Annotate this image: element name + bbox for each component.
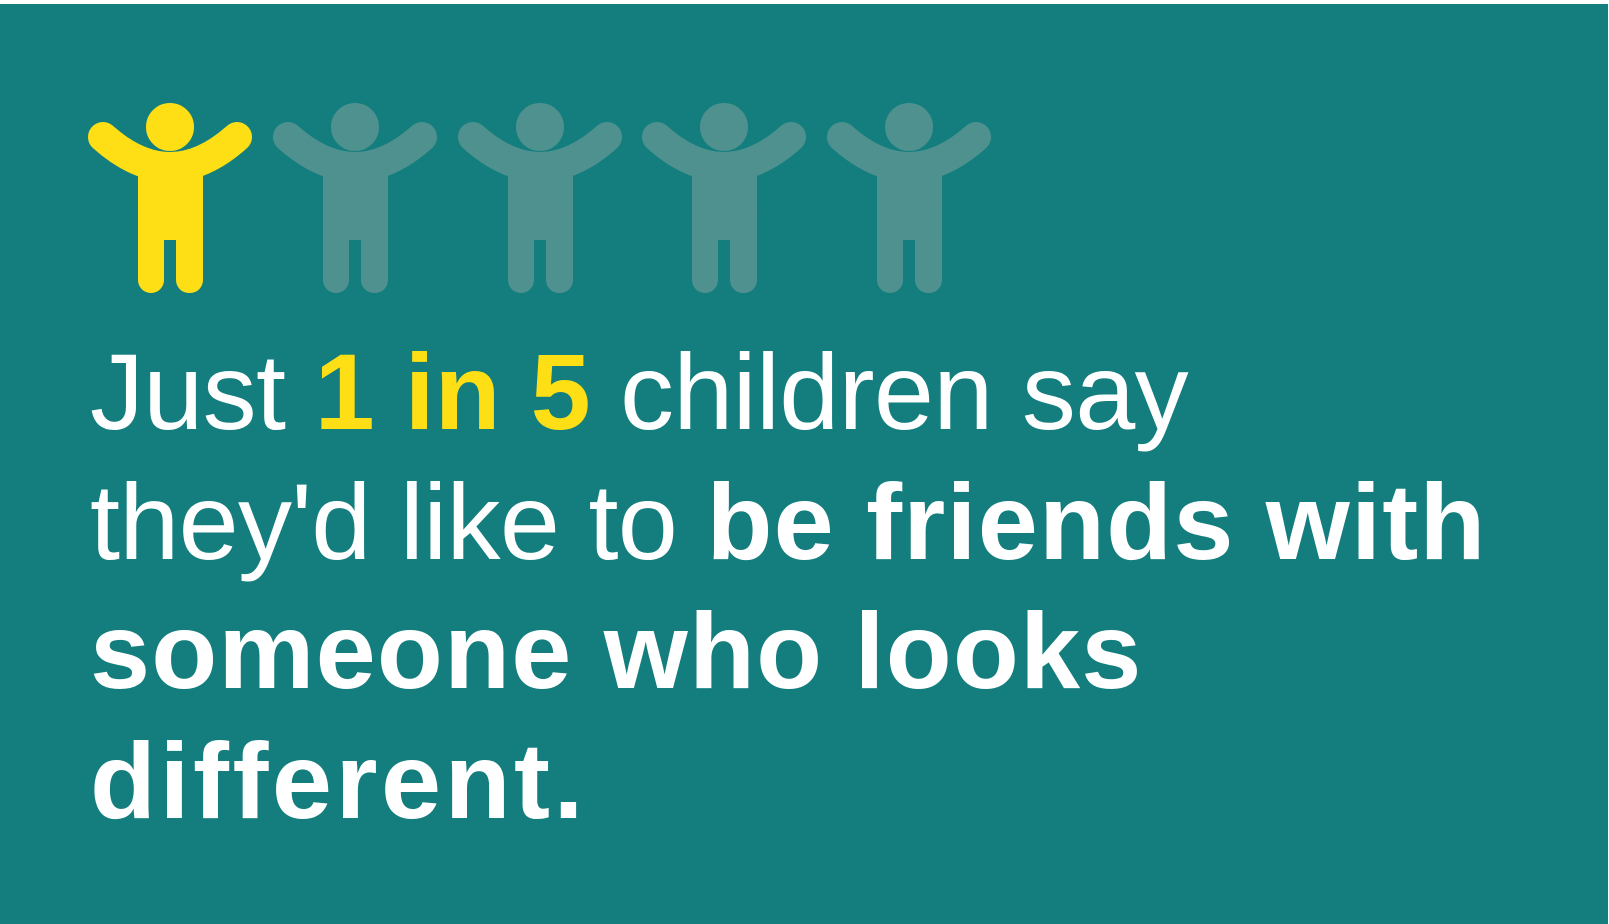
text line 2: they'd like to be friends with [90,461,1487,582]
icon: faded child 4 [657,104,791,293]
icons: five children, one highlighted [88,103,991,293]
icon: yellow child [103,104,237,293]
text line 1: Just 1 in 5 children say [90,331,1188,452]
icon: faded child 5 [842,104,976,293]
text line 4: different. [90,720,587,841]
icon: faded child 2 [288,104,422,293]
text line 3: someone who looks [90,590,1143,711]
icon: faded child 3 [473,104,607,293]
